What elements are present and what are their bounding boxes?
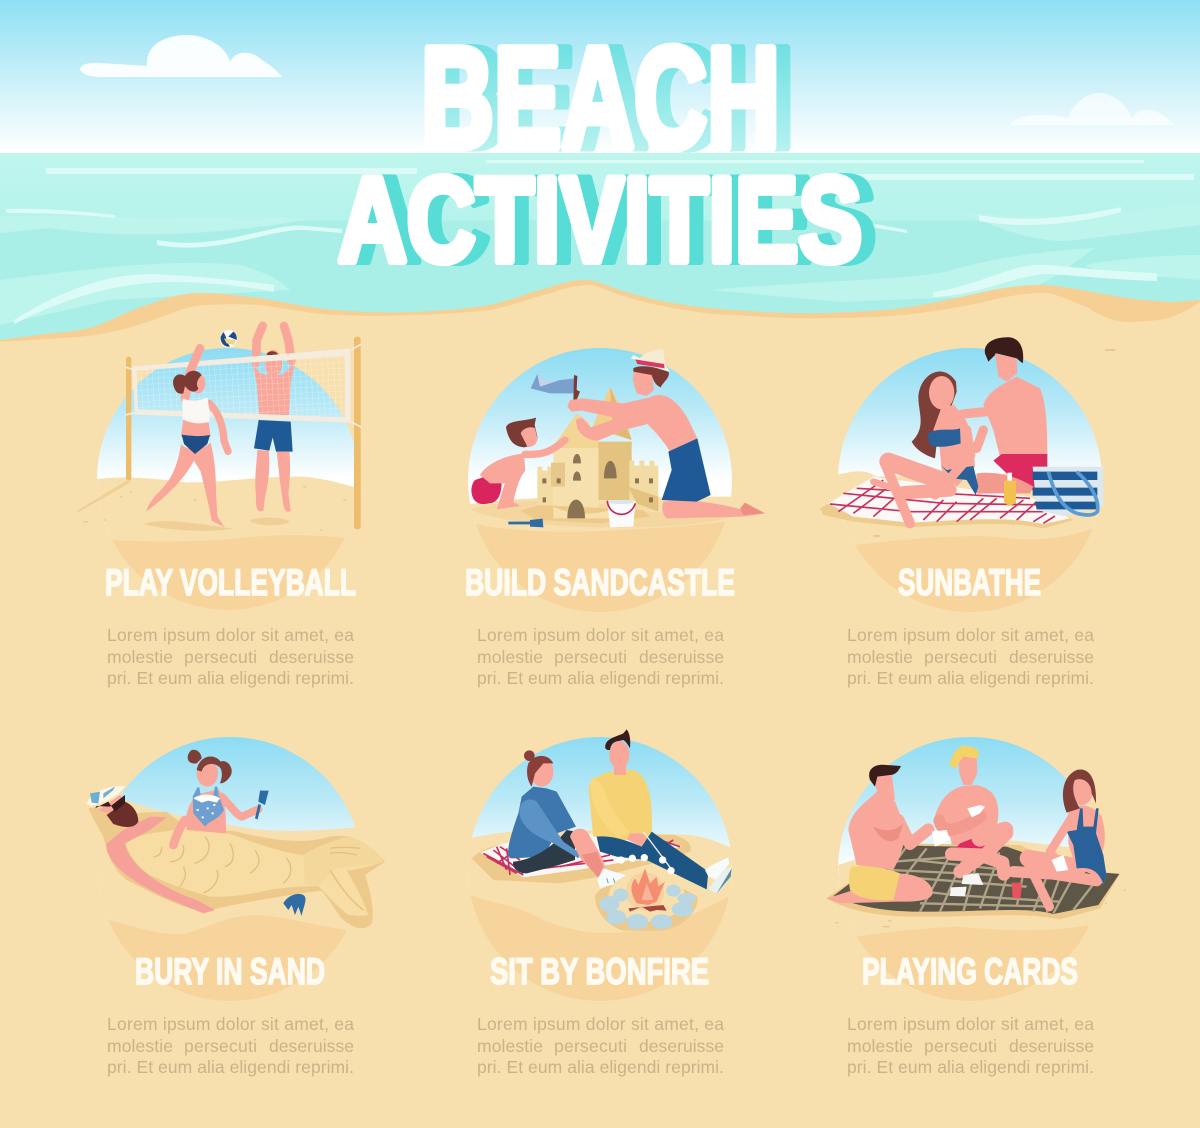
description: Lorem ipsum dolor sit amet, ea — [847, 625, 1094, 645]
shore wet sand — [0, 280, 1200, 345]
description: molestie — [107, 1036, 173, 1056]
heading: BUILD SANDCASTLE — [465, 562, 735, 603]
panel: bury in sand — [87, 737, 385, 1077]
panel: build sandcastle — [463, 348, 765, 688]
description: molestie — [847, 647, 913, 667]
heading: PLAY VOLLEYBALL — [105, 562, 356, 603]
description: persecuti — [924, 647, 997, 667]
panel: play volleyball — [77, 326, 363, 688]
playing cards illustration — [826, 737, 1126, 1030]
description: pri. Et eum alia eligendi reprimi. — [477, 1057, 724, 1077]
description: deseruisse — [269, 1036, 354, 1056]
description: Lorem ipsum dolor sit amet, ea — [107, 1014, 354, 1034]
heading: BURY IN SAND — [135, 951, 325, 992]
description: persecuti — [184, 1036, 257, 1056]
heading: SUNBATHE — [898, 562, 1041, 603]
sky — [0, 0, 1200, 153]
description: persecuti — [554, 647, 627, 667]
title: ACTIVITIES: ACTIVITIES — [338, 153, 862, 287]
description: persecuti — [924, 1036, 997, 1056]
light wave shapes — [0, 205, 1200, 325]
panel: sunbathe — [820, 337, 1115, 688]
description: deseruisse — [269, 647, 354, 667]
panel: sit by bonfire — [467, 729, 733, 1077]
description: persecuti — [184, 647, 257, 667]
description: molestie — [107, 647, 173, 667]
description: deseruisse — [1009, 647, 1094, 667]
description: molestie — [847, 1036, 913, 1056]
description: pri. Et eum alia eligendi reprimi. — [107, 668, 354, 688]
description: Lorem ipsum dolor sit amet, ea — [477, 625, 724, 645]
heading: PLAYING CARDS — [862, 951, 1078, 992]
description: Lorem ipsum dolor sit amet, ea — [107, 625, 354, 645]
bonfire illustration — [467, 729, 733, 1020]
cloud right — [1010, 93, 1175, 125]
description: pri. Et eum alia eligendi reprimi. — [107, 1057, 354, 1077]
heading: SIT BY BONFIRE — [490, 951, 709, 992]
description: molestie — [477, 1036, 543, 1056]
panel: playing cards — [826, 737, 1126, 1077]
title: BEACH: BEACH — [421, 19, 780, 178]
sea — [0, 153, 1200, 350]
foam streaks — [6, 160, 1194, 324]
sunbathe illustration — [820, 337, 1115, 630]
description: persecuti — [554, 1036, 627, 1056]
volleyball illustration — [77, 326, 363, 620]
cloud left — [80, 35, 282, 77]
description: pri. Et eum alia eligendi reprimi. — [847, 668, 1094, 688]
title: ACTIVITIES: ACTIVITIES — [352, 153, 876, 287]
description: pri. Et eum alia eligendi reprimi. — [477, 668, 724, 688]
shore dry sand — [0, 285, 1200, 350]
description: deseruisse — [1009, 1036, 1094, 1056]
description: molestie — [477, 647, 543, 667]
bury in sand illustration — [87, 737, 385, 1030]
sandcastle illustration — [468, 348, 765, 612]
description: Lorem ipsum dolor sit amet, ea — [847, 1014, 1094, 1034]
description: deseruisse — [639, 647, 724, 667]
description: pri. Et eum alia eligendi reprimi. — [847, 1057, 1094, 1077]
description: Lorem ipsum dolor sit amet, ea — [477, 1014, 724, 1034]
description: deseruisse — [639, 1036, 724, 1056]
title: BEACH: BEACH — [435, 19, 794, 178]
